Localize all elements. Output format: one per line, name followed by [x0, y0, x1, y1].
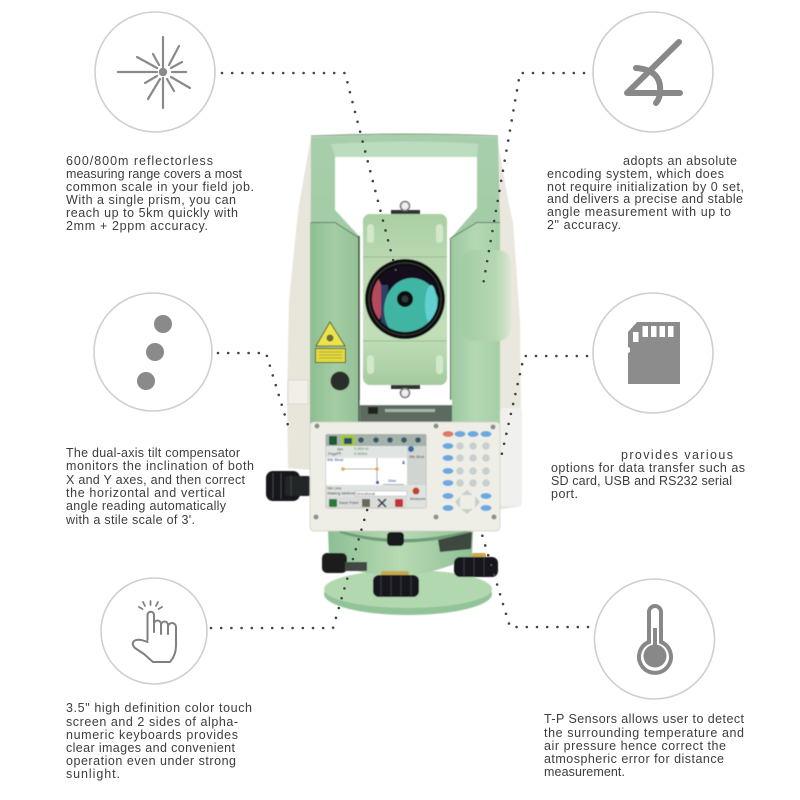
- touch screen: 0.000m: [354, 451, 368, 456]
- text: touch screen description: clear images and convenient: [66, 741, 236, 755]
- text: compensator description: angle reading automatically: [66, 499, 227, 513]
- text: data transfer description: provides various: [621, 448, 733, 462]
- touch screen: Stk Line: [327, 486, 342, 490]
- touch screen: Page: [328, 451, 338, 456]
- icon: laser burst: [95, 12, 215, 132]
- panel: touch screen: [66, 578, 252, 781]
- dotted leader: middle left: [218, 353, 290, 432]
- text: sensors description: T-P Sensors allows user to detect: [544, 712, 745, 726]
- text: touch screen description: screen and 2 sides of alpha-: [66, 715, 238, 729]
- touch screen: Staking Method: [327, 490, 355, 496]
- dotted leader: top right: [483, 73, 584, 285]
- text: compensator description: [65, 446, 254, 527]
- text: touch screen description: [66, 701, 252, 781]
- text: data transfer description: port.: [551, 487, 578, 501]
- text: compensator description: monitors the inclination of both: [66, 459, 254, 473]
- icon: SD card: [593, 293, 713, 413]
- control panel: [310, 422, 500, 531]
- touch screen: Stn: [337, 446, 343, 452]
- touch screen: Save Point: [339, 500, 359, 505]
- text: compensator description: X and Y axes, and then correct: [66, 473, 246, 487]
- text: range description: With a single prism, you can: [66, 193, 236, 207]
- text: encoding description: encoding system, which does: [547, 167, 724, 181]
- icon: three dots: [94, 293, 212, 411]
- dotted leader: bottom right: [480, 528, 588, 627]
- keypad: [442, 431, 492, 514]
- text: sensors description: the surrounding temperature and: [544, 726, 744, 740]
- objective lens: [365, 259, 445, 342]
- touch screen: 20m: [388, 478, 396, 483]
- text: compensator description: The dual-axis tilt compensator: [66, 446, 240, 460]
- text: range description: reach up to 5km quickly with: [66, 206, 238, 220]
- text: encoding description: angle measurement with up to: [547, 205, 731, 219]
- text: touch screen description: sunlight.: [66, 767, 120, 781]
- tribrach base plate: [324, 570, 492, 615]
- dotted leader: middle right: [500, 356, 587, 462]
- panel: absolute encoding: [547, 12, 744, 232]
- cream side housing: [287, 137, 522, 510]
- power button: [330, 372, 350, 390]
- text: sensors description: [544, 712, 745, 779]
- text: range description: 600/800m reflectorless: [66, 154, 213, 168]
- gap with rear parts: [360, 400, 452, 424]
- text: encoding description: adopts an absolute: [623, 154, 737, 168]
- icon: tapping hand: [101, 578, 207, 684]
- text: sensors description: atmospheric error for distance: [544, 752, 724, 766]
- instrument: total station: [266, 134, 522, 615]
- side knob: [461, 250, 511, 341]
- text: encoding description: and delivers a precise and stable: [547, 192, 743, 206]
- text: compensator description: with a stile scale of 3'.: [65, 513, 195, 527]
- text: encoding description: [547, 154, 744, 232]
- text: range description: common scale in your field job.: [66, 180, 254, 194]
- touch screen: Stk Shot: [327, 457, 344, 462]
- text: encoding description: not require initialization by 0 set,: [547, 180, 744, 194]
- text: range description: 2mm + 2ppm accuracy.: [66, 219, 208, 233]
- text: sensors description: measurement.: [544, 765, 625, 779]
- panel: tilt compensator: [65, 293, 254, 527]
- text: encoding description: 2" accuracy.: [547, 218, 621, 232]
- telescope housing: [363, 202, 447, 398]
- upper base: [328, 530, 473, 574]
- touch screen: Directional: [356, 491, 375, 496]
- dotted leader: top left: [222, 73, 397, 275]
- icon: thermometer: [594, 579, 714, 699]
- panel: data transfer: [551, 293, 745, 501]
- text: sensors description: air pressure hence correct the: [544, 739, 726, 753]
- text: range description: measuring range covers a most: [66, 167, 243, 181]
- touch screen: Measure: [410, 496, 426, 501]
- text: touch screen description: 3.5" high definition color touch: [66, 701, 252, 715]
- text: touch screen description: numeric keyboards provides: [66, 728, 238, 742]
- carrying handle and arms: [310, 134, 500, 424]
- dotted leader: bottom left: [211, 507, 368, 628]
- laser warning label: [316, 322, 346, 362]
- text: data transfer description: [551, 448, 745, 501]
- icon: angle: [593, 12, 713, 132]
- panel: T-P sensors: [544, 579, 745, 779]
- touch screen: Ht: [337, 450, 342, 456]
- panel: reflectorless range: [66, 12, 254, 233]
- text: compensator description: the horizontal and vertical: [66, 486, 225, 500]
- leveling screws: [322, 553, 498, 597]
- text: touch screen description: operation even under strong: [66, 754, 236, 768]
- text: data transfer description: options for data transfer such as: [551, 461, 745, 475]
- touch screen: 0.000 m: [354, 446, 369, 451]
- touch screen: Stk Shot: [409, 454, 425, 459]
- text: range description: [66, 154, 254, 233]
- touch screen: [326, 434, 426, 508]
- text: data transfer description: SD card, USB and RS232 serial: [551, 474, 732, 488]
- focus knob on left: [266, 471, 311, 501]
